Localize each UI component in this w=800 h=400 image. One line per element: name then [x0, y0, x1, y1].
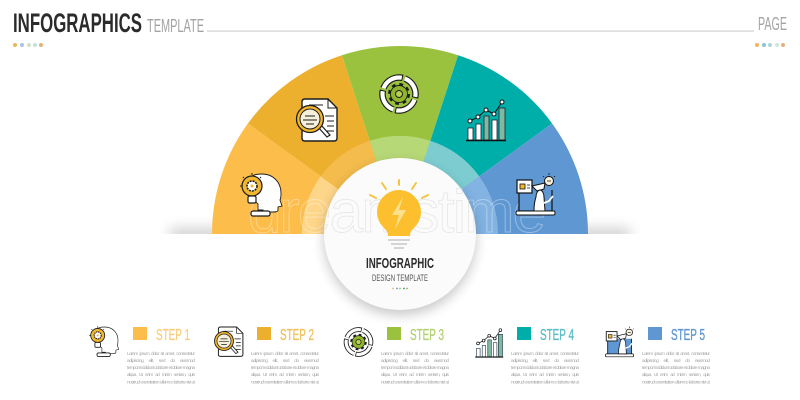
segment: step 3 [342, 46, 458, 234]
text: step 1: Lorem ipsum dolor sit amet, consectetur [127, 351, 195, 357]
step 3 [343, 326, 450, 386]
ground shadow [170, 229, 630, 241]
label: step 4: STEP 4 [540, 327, 574, 344]
text: step 2: aliqua. Ut enim ad minim veniam, quis [251, 372, 320, 378]
label: step 5: STEP 5 [671, 327, 705, 344]
text: step 1: nostrud exercitation ullamco laboris nisi ut [127, 380, 196, 386]
text: step 5: nostrud exercitation ullamco laboris nisi ut [642, 380, 711, 386]
icon: step 5 [606, 327, 634, 357]
subtitle: TEMPLATE [147, 16, 204, 36]
right dots [755, 43, 785, 47]
icon: step 2 [215, 327, 243, 356]
text: step 3: tempor incididunt ut labore et dolore magna [381, 365, 449, 371]
text: step 4: tempor incididunt ut labore et dolore magna [511, 365, 579, 371]
segment: step 4 [400, 55, 552, 234]
text: step 2: Lorem ipsum dolor sit amet, consectetur [251, 351, 319, 357]
icon: gear with arrows [378, 73, 420, 115]
text: step 1: aliqua. Ut enim ad minim veniam, quis [127, 372, 196, 378]
text: step 2: tempor incididunt ut labore et dolore magna [251, 365, 319, 371]
step 2 [215, 327, 320, 386]
text: step 4: aliqua. Ut enim ad minim veniam, quis [511, 372, 580, 378]
swatch: step 1 [133, 327, 147, 340]
text: step 2: nostrud exercitation ullamco laboris nisi ut [251, 380, 320, 386]
text: step 5: tempor incididunt ut labore et dolore magna [642, 365, 710, 371]
icon: document with magnifier [296, 99, 337, 141]
left dots [13, 43, 43, 47]
text: step 3: Lorem ipsum dolor sit amet, consectetur [381, 351, 449, 357]
icon: center lightbulb [370, 180, 428, 248]
swatch: step 5 [648, 327, 662, 340]
icon: growth bar chart [466, 100, 506, 140]
center circle [318, 158, 482, 320]
watermark on circle: dreamstime [248, 178, 546, 245]
swatch: step 3 [387, 327, 401, 340]
center heading: INFOGRAPHIC [366, 255, 434, 272]
text: step 5: adipiscing elit, sed do eiusmod [642, 358, 710, 364]
label: step 2: STEP 2 [280, 327, 314, 344]
text: step 5 [642, 351, 711, 386]
header [13, 8, 787, 47]
text: step 5: aliqua. Ut enim ad minim veniam, quis [642, 372, 711, 378]
swatch: step 2 [257, 327, 271, 340]
step 1 [89, 326, 196, 386]
text: step 4: adipiscing elit, sed do eiusmod [511, 358, 579, 364]
icon: step 1 [89, 326, 119, 356]
swatch: step 4 [517, 327, 531, 340]
step 5 [606, 327, 711, 386]
text: step 2 [251, 351, 320, 386]
segment: step 2 [248, 55, 400, 234]
text: step 1: tempor incididunt ut labore et dolore magna [127, 365, 195, 371]
text: step 1 [127, 351, 196, 386]
text: step 4: nostrud exercitation ullamco laboris nisi ut [511, 380, 580, 386]
watermark: dreamstime [248, 178, 546, 245]
icon: head with lightbulb [240, 173, 282, 216]
icon: presenter on laptop [516, 173, 555, 215]
text: step 3: adipiscing elit, sed do eiusmod [381, 358, 449, 364]
text: step 1: adipiscing elit, sed do eiusmod [127, 358, 195, 364]
center dots [392, 288, 408, 289]
center subheading: DESIGN TEMPLATE [372, 273, 428, 283]
text: step 3: aliqua. Ut enim ad minim veniam, quis [381, 372, 450, 378]
label: step 1: STEP 1 [156, 327, 190, 344]
text: step 3: nostrud exercitation ullamco laboris nisi ut [381, 380, 450, 386]
semicircle chart [212, 46, 588, 234]
segment: step 5 [400, 124, 588, 234]
icon: step 3 [343, 326, 374, 358]
text: step 4 [511, 351, 580, 386]
label: step 3: STEP 3 [410, 327, 444, 344]
icon: step 4 [475, 329, 503, 357]
segment: step 1 [212, 124, 400, 234]
text: step 5: Lorem ipsum dolor sit amet, consectetur [642, 351, 710, 357]
step 4 [475, 327, 580, 386]
text: step 4: Lorem ipsum dolor sit amet, consectetur [511, 351, 579, 357]
title: INFOGRAPHICS [13, 8, 142, 38]
text: step 2: adipiscing elit, sed do eiusmod [251, 358, 319, 364]
text: step 3 [381, 351, 450, 386]
inner ring [302, 136, 498, 234]
